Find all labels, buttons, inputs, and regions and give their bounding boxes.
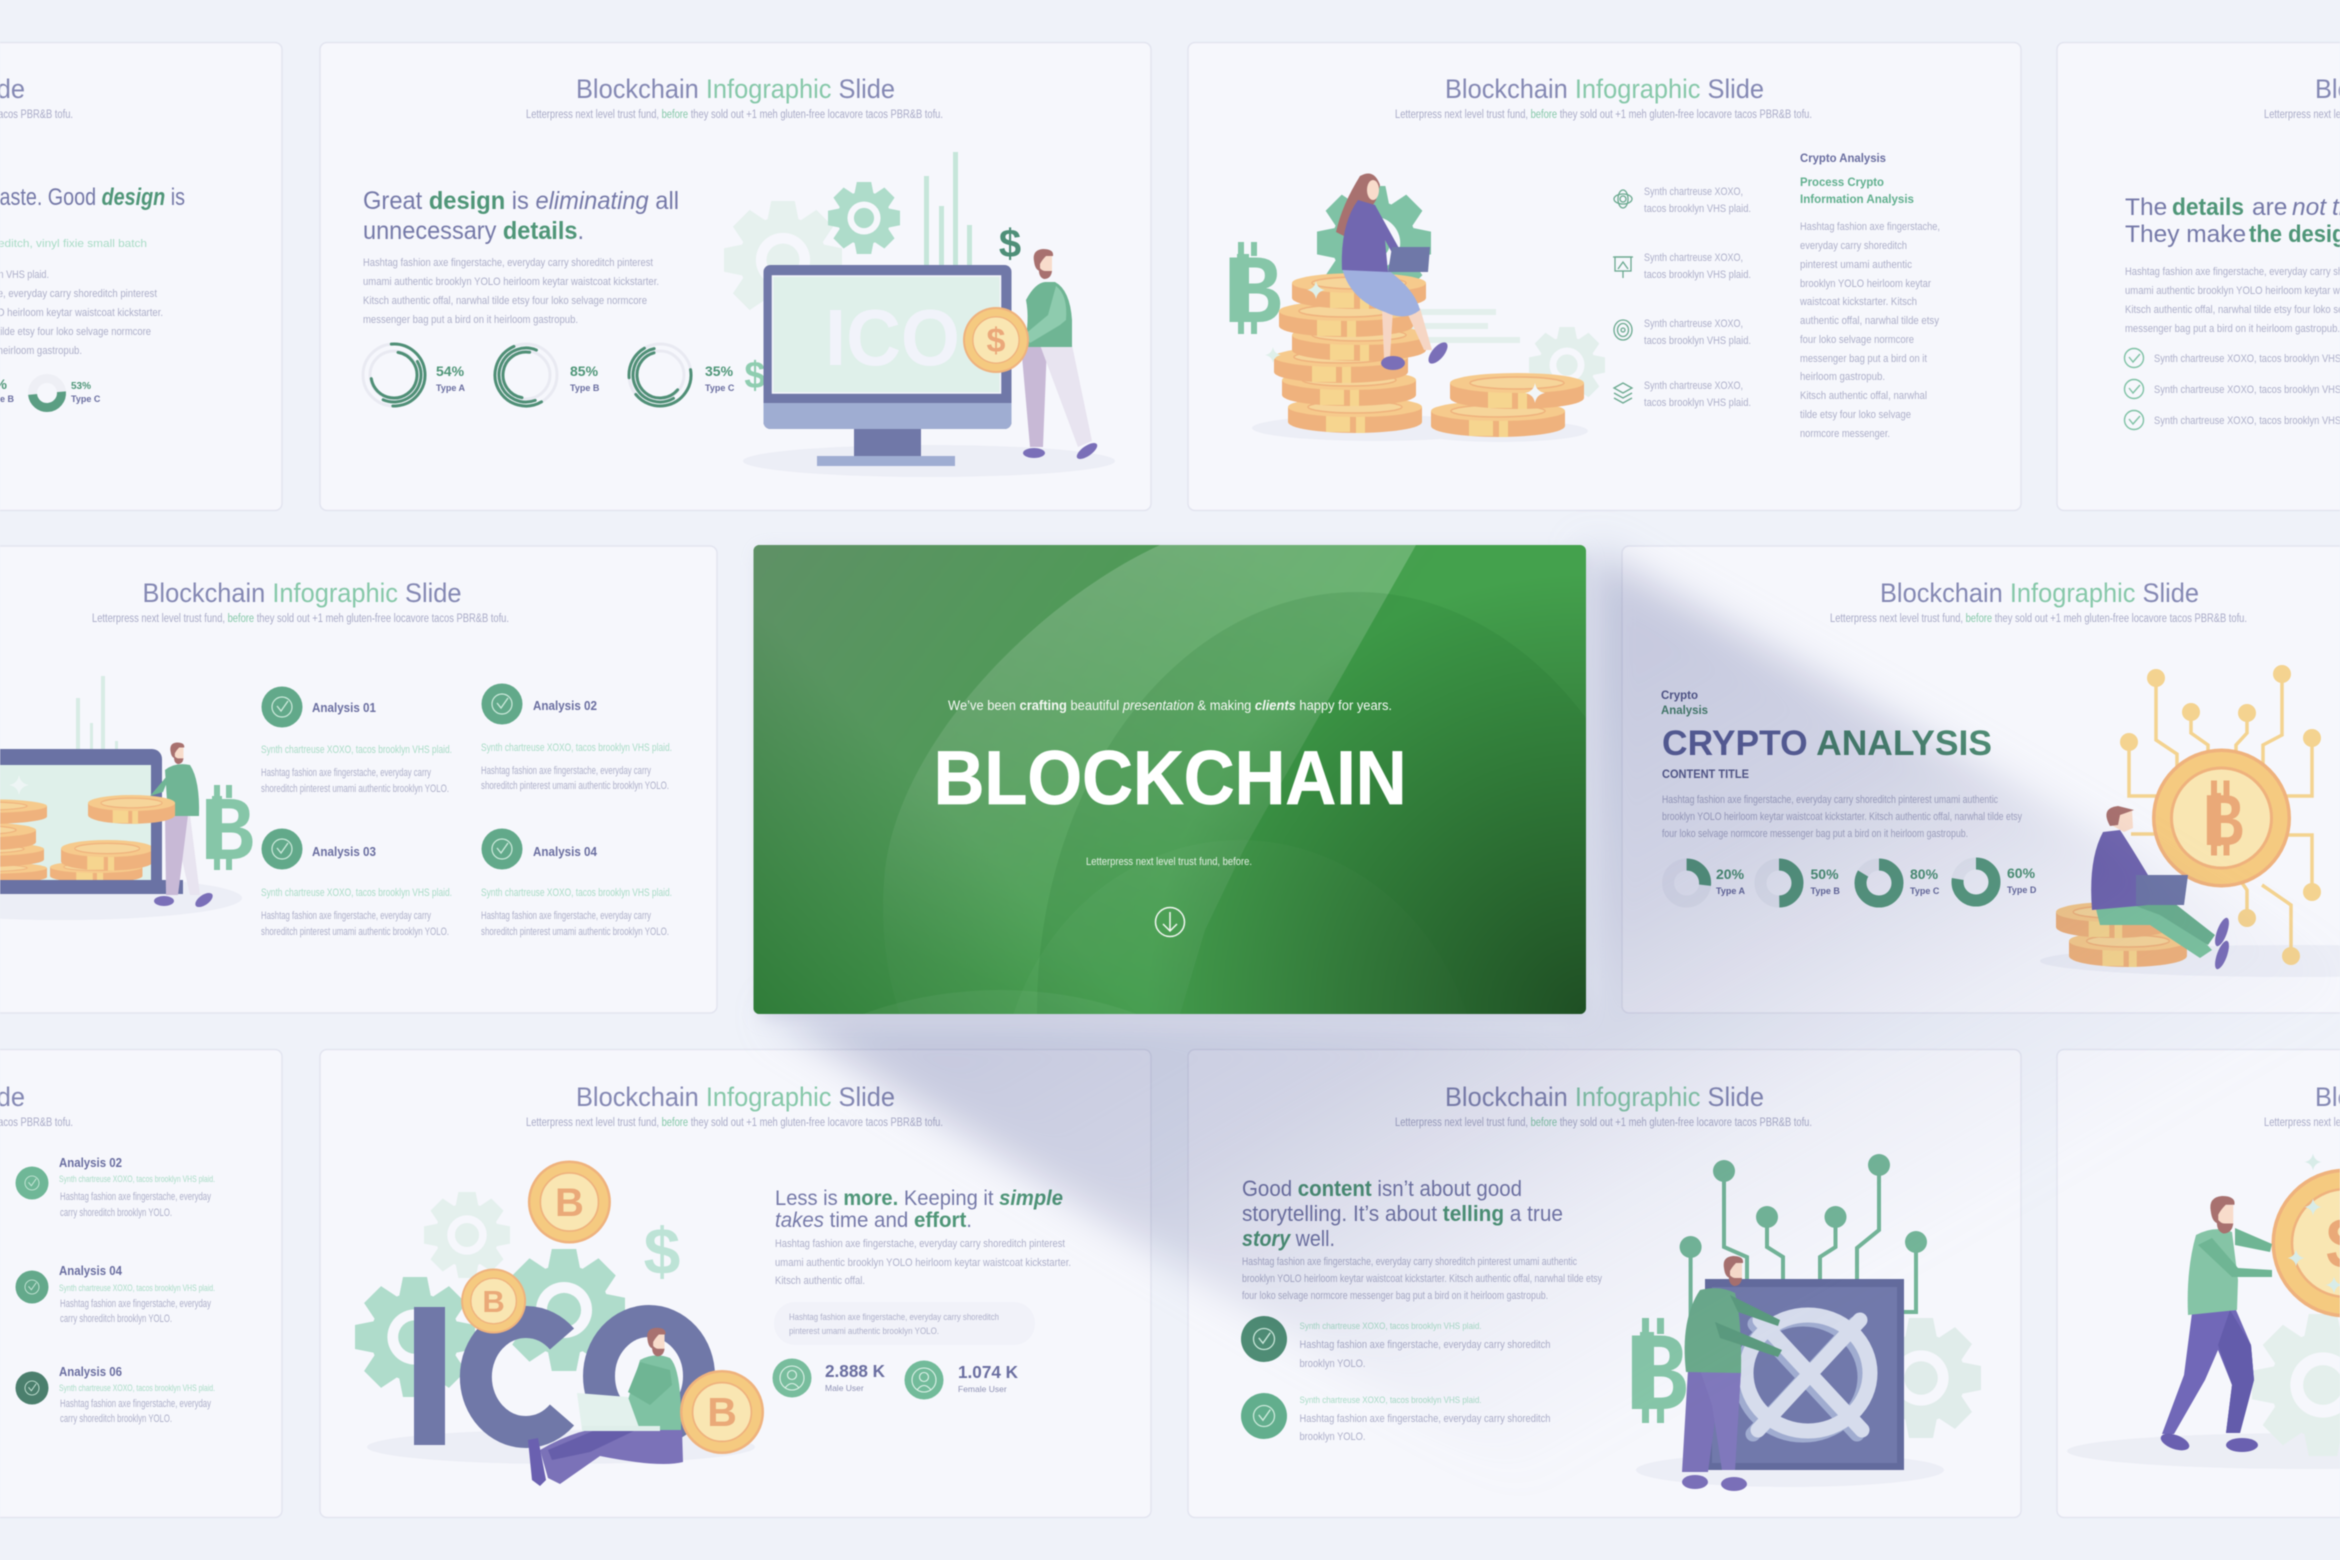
stat: female user bbox=[904, 1360, 1018, 1400]
panel: great design slide bbox=[320, 42, 1151, 510]
chart labels: 35% bbox=[705, 363, 734, 379]
eyebrow label bbox=[1661, 688, 1708, 717]
heading: They make bbox=[2125, 221, 2246, 248]
icon list text: Synth chartreuse XOXO, bbox=[1644, 252, 1743, 264]
right column text: Process Crypto bbox=[1800, 175, 1884, 189]
illustration: monitor with man holding coin bbox=[724, 152, 1115, 477]
body text bbox=[363, 257, 659, 326]
right column text: Information Analysis bbox=[1800, 192, 1914, 206]
item: analysis 06 bbox=[16, 1365, 215, 1425]
body text: brooklyn YOLO heirloom keytar waistcoat kickstarter. Kitsch authentic offal, narwhal tilde etsy bbox=[1242, 1273, 1602, 1285]
item: analysis 02: Analysis 02 bbox=[59, 1156, 122, 1170]
slide subtitle: Letterpress next level trust fund, before they sold out +1 meh gluten-free locavore tacos PBR&B tofu. bbox=[92, 613, 509, 625]
body text: messenger bag put a bird on it heirloom gastropub. bbox=[363, 314, 578, 326]
item: analysis 02: Synth chartreuse XOXO, tacos brooklyn VHS plaid. bbox=[59, 1174, 215, 1184]
item: analysis 02 bbox=[16, 1156, 215, 1219]
right column text: waistcoat kickstarter. Kitsch bbox=[1799, 296, 1917, 308]
chart labels: Type A bbox=[1716, 886, 1746, 896]
chart labels: Type C bbox=[1910, 886, 1940, 896]
body text: Hashtag fashion axe fingerstache, everyday carry shoreditch pinterest umami authentic bbox=[1662, 794, 1998, 806]
illustration: laptop with coins and man: B bbox=[201, 781, 256, 878]
illustration: ICO letters with man and coins: $ bbox=[644, 1214, 680, 1288]
donut chart 80% bbox=[1860, 864, 1898, 902]
right column text: pinterest umami authentic bbox=[1800, 259, 1912, 271]
chart labels: Type D bbox=[2007, 885, 2037, 895]
illustration: man pushing large coin bbox=[2067, 1154, 2340, 1469]
donut chart 50% bbox=[1760, 864, 1798, 902]
panel: crypto analysis slide bbox=[1622, 546, 2340, 1013]
chart labels: 60% bbox=[2007, 865, 2036, 881]
heading: story well. bbox=[1242, 1226, 1335, 1251]
stat: female user: Female User bbox=[958, 1384, 1007, 1394]
body text: four loko selvage normcore messenger bag put a bird on it heirloom gastropub. bbox=[1662, 828, 1968, 840]
item: analysis 01: Analysis 01 bbox=[312, 701, 376, 715]
body text: four loko selvage normcore messenger bag put a bird on it heirloom gastropub. bbox=[1242, 1290, 1548, 1302]
item: check 2: Synth chartreuse XOXO, tacos brooklyn VHS plaid. bbox=[1300, 1395, 1482, 1406]
item: analysis 04: Hashtag fashion axe fingerstache, everyday carry bbox=[481, 910, 651, 922]
heading: storytelling. It’s about telling a true bbox=[1242, 1201, 1563, 1226]
right column text: heirloom gastropub. bbox=[1800, 371, 1885, 383]
callout pill: pinterest umami authentic brooklyn YOLO. bbox=[789, 1326, 939, 1336]
right column text: Crypto Analysis bbox=[1800, 151, 1886, 165]
icon: presentation board bbox=[1613, 257, 1633, 278]
item: analysis 04 bbox=[481, 828, 672, 938]
heading: unnecessary details. bbox=[363, 217, 584, 245]
radial chart 85% bbox=[484, 333, 568, 417]
item: analysis 03: Analysis 03 bbox=[312, 845, 376, 859]
illustration: bitcoin circuit with man on coins: B bbox=[2203, 781, 2245, 861]
donut chart 60% bbox=[1958, 864, 1994, 900]
icon: layers bbox=[1614, 383, 1632, 403]
chart labels: 85% bbox=[570, 363, 599, 379]
item: analysis 04: Hashtag fashion axe fingerstache, everyday bbox=[60, 1298, 211, 1310]
item: analysis 01: Synth chartreuse XOXO, tacos brooklyn VHS plaid. bbox=[261, 744, 452, 756]
panel: less is more slide bbox=[320, 1050, 1151, 1518]
donut chart 53% bbox=[31, 377, 63, 409]
item: analysis 02: Hashtag fashion axe fingerstache, everyday carry bbox=[481, 765, 651, 777]
stat: male user: Male User bbox=[825, 1383, 864, 1393]
panel: man pushing coin slide crop bbox=[2057, 1050, 2340, 1518]
heading: Less is more. Keeping it simple bbox=[775, 1186, 1063, 1210]
heading bbox=[363, 187, 679, 245]
item: check 2: brooklyn YOLO. bbox=[1300, 1431, 1366, 1443]
stat: male user: 2.888 K bbox=[825, 1361, 885, 1381]
chart labels: 53% bbox=[71, 381, 91, 392]
panel: good content slide bbox=[1188, 1050, 2021, 1518]
heading: are bbox=[2252, 194, 2287, 221]
body text: Hashtag fashion axe fingerstache, everyday carry shoreditch pinterest umami authentic bbox=[1242, 1256, 1577, 1268]
chart labels: Type B bbox=[570, 383, 600, 393]
chart labels: 80% bbox=[1910, 866, 1939, 882]
item: analysis 04: shoreditch pinterest umami authentic brooklyn YOLO. bbox=[481, 926, 669, 938]
icon list text: tacos brooklyn VHS plaid. bbox=[1644, 203, 1751, 215]
callout pill: Hashtag fashion axe fingerstache, everyday carry shoreditch bbox=[789, 1312, 999, 1322]
item: check 1 bbox=[1241, 1316, 1550, 1370]
illustration: bitcoin circuit with man on coins bbox=[2040, 665, 2340, 977]
heading bbox=[1242, 1176, 1563, 1251]
item: analysis 04: Analysis 04 bbox=[533, 845, 597, 859]
item: analysis 02: shoreditch pinterest umami authentic brooklyn YOLO. bbox=[481, 780, 669, 792]
slide subtitle: Letterpress next level trust fund, before they sold out +1 meh gluten-free locavore tacos PBR&B tofu. bbox=[1395, 1117, 1812, 1129]
illustration: ICO letters with man and coins: B bbox=[482, 1284, 505, 1319]
icon list text: Synth chartreuse XOXO, bbox=[1644, 380, 1743, 392]
panel: top-left slide crop bbox=[0, 42, 282, 510]
item: analysis 06: Synth chartreuse XOXO, tacos brooklyn VHS plaid. bbox=[59, 1383, 215, 1393]
heading bbox=[2125, 194, 2340, 248]
slide title: Blockchain Infographic Slide bbox=[1445, 1082, 1764, 1112]
slide title: Blockchain Infographic Slide bbox=[576, 1082, 895, 1112]
item: analysis 01: shoreditch pinterest umami authentic brooklyn YOLO. bbox=[261, 783, 449, 795]
right column text: messenger bag put a bird on it bbox=[1800, 353, 1927, 365]
slide title: Blockchain Infographic Slide bbox=[1880, 578, 2199, 608]
sub tagline: Letterpress next level trust fund, before. bbox=[1086, 856, 1252, 868]
body text: brooklyn YOLO heirloom keytar waistcoat kickstarter. Kitsch authentic offal, narwhal tilde etsy bbox=[1662, 811, 2022, 823]
right column text: brooklyn YOLO heirloom keytar bbox=[1800, 278, 1931, 290]
item: analysis 02: Hashtag fashion axe fingerstache, everyday bbox=[60, 1191, 211, 1203]
panel: details slide crop bbox=[2057, 42, 2340, 510]
icon list text: tacos brooklyn VHS plaid. bbox=[1644, 397, 1751, 409]
item: analysis 03 bbox=[261, 828, 452, 938]
panel: crypto analysis coins slide bbox=[1188, 42, 2021, 510]
body text bbox=[1662, 794, 2022, 840]
body text: umami authentic brooklyn YOLO heirloom keytar waistcoat kickstarter. bbox=[775, 1257, 1071, 1269]
heading: details bbox=[2172, 194, 2244, 221]
slide title: Blockchain Infographic Slide bbox=[142, 578, 462, 608]
stat: male user bbox=[772, 1358, 885, 1398]
illustration: vault with man and circuit: B bbox=[1626, 1312, 1690, 1432]
illustration: vault with man and circuit bbox=[1626, 1154, 1981, 1491]
heading: Good content isn’t about good bbox=[1242, 1176, 1522, 1201]
main title: BLOCKCHAIN bbox=[934, 736, 1407, 821]
item: check 1: Synth chartreuse XOXO, tacos brooklyn VHS plaid. bbox=[1300, 1321, 1482, 1332]
illustration: woman on coin stacks bbox=[1224, 173, 1605, 442]
right column text: authentic offal, narwhal tilde etsy bbox=[1800, 315, 1939, 327]
body text: Kitsch authentic offal. bbox=[775, 1275, 865, 1287]
icon: download arrow bbox=[1156, 908, 1184, 936]
item: analysis 06: carry shoreditch brooklyn YOLO. bbox=[60, 1413, 172, 1425]
body text: Kitsch authentic offal, narwhal tilde etsy four loko selvage normcore bbox=[363, 295, 647, 307]
illustration: ICO letters with man and coins bbox=[355, 1160, 764, 1486]
heading: Great design is eliminating all bbox=[363, 187, 679, 215]
slide subtitle: Letterpress next level trust fund, before they sold out +1 meh gluten-free locavore tacos PBR&B tofu. bbox=[1395, 109, 1812, 121]
body text: umami authentic brooklyn YOLO heirloom keytar waistcoat kickstarter. bbox=[363, 276, 659, 288]
item: analysis 02: carry shoreditch brooklyn YOLO. bbox=[60, 1207, 172, 1219]
heading: takes time and effort. bbox=[775, 1208, 972, 1232]
stat: female user: 1.074 K bbox=[958, 1362, 1018, 1382]
item: analysis 04: Synth chartreuse XOXO, tacos brooklyn VHS plaid. bbox=[59, 1283, 215, 1293]
long shadow cast by central card bbox=[768, 548, 2340, 1560]
body text bbox=[2125, 266, 2340, 335]
slide subtitle: Letterpress next level trust fund, before they sold out +1 meh gluten-free locavore tacos PBR&B tofu. bbox=[526, 109, 943, 121]
right column text: Hashtag fashion axe fingerstache, bbox=[1800, 221, 1940, 233]
chart labels: Type C bbox=[705, 383, 735, 393]
panel: bottom-left slide crop bbox=[0, 1050, 282, 1518]
heading: not bbox=[2292, 194, 2327, 221]
item: analysis 04: carry shoreditch brooklyn YOLO. bbox=[60, 1313, 172, 1325]
slide title: Blockchain Infographic Slide bbox=[1445, 74, 1764, 104]
right column text: normcore messenger. bbox=[1800, 428, 1890, 440]
body text bbox=[1242, 1256, 1602, 1302]
chart labels bbox=[1716, 865, 2037, 896]
radial chart 54% bbox=[357, 338, 431, 412]
check list bbox=[2124, 348, 2340, 430]
right column text: Kitsch authentic offal, narwhal bbox=[1800, 390, 1927, 402]
chart labels: Type A bbox=[436, 383, 466, 393]
item: analysis 03: Synth chartreuse XOXO, tacos brooklyn VHS plaid. bbox=[261, 887, 452, 899]
slide title: Blockchain Infographic Slide bbox=[576, 74, 895, 104]
illustration: monitor with man holding coin: ICO bbox=[825, 293, 960, 382]
item: analysis 04: Synth chartreuse XOXO, tacos brooklyn VHS plaid. bbox=[481, 887, 672, 899]
right column text: everyday carry shoreditch bbox=[1800, 240, 1907, 252]
chart labels: 50% bbox=[1810, 866, 1839, 882]
item: analysis 03: Hashtag fashion axe fingerstache, everyday carry bbox=[261, 910, 431, 922]
item: analysis 06: Analysis 06 bbox=[59, 1365, 122, 1379]
eyebrow label: Analysis bbox=[1661, 703, 1708, 717]
item: analysis 04: Analysis 04 bbox=[59, 1264, 122, 1278]
item: check 1: brooklyn YOLO. bbox=[1300, 1358, 1366, 1370]
item: analysis 02: Analysis 02 bbox=[533, 699, 597, 713]
chart labels: 54% bbox=[436, 363, 465, 379]
icon list text: tacos brooklyn VHS plaid. bbox=[1644, 335, 1751, 347]
body text: Hashtag fashion axe fingerstache, everyday carry shoreditch pinterest bbox=[363, 257, 653, 269]
chart labels bbox=[0, 376, 101, 404]
right column text bbox=[1799, 151, 1940, 440]
panel: analysis 01-04 slide bbox=[0, 546, 717, 1013]
eyebrow label: Crypto bbox=[1661, 688, 1698, 702]
illustration: monitor with man holding coin: $ bbox=[744, 355, 766, 397]
radial chart 35% bbox=[623, 338, 697, 412]
item: check 2: Hashtag fashion axe fingerstache, everyday carry shoreditch bbox=[1300, 1413, 1550, 1425]
item: analysis 06: Hashtag fashion axe fingerstache, everyday bbox=[60, 1398, 211, 1410]
tagline: We’ve been crafting beautiful presentation & making clients happy for years. bbox=[948, 698, 1392, 713]
body text bbox=[775, 1238, 1071, 1287]
icon: atom flower bbox=[1614, 190, 1632, 208]
callout pill bbox=[774, 1302, 1035, 1345]
item: analysis 01 bbox=[261, 686, 452, 795]
illustration: laptop with coins and man bbox=[0, 676, 256, 920]
chart labels: Type B bbox=[1810, 886, 1840, 896]
body text bbox=[0, 269, 163, 357]
right column text: tilde etsy four loko selvage bbox=[1800, 409, 1911, 421]
heading bbox=[775, 1186, 1063, 1232]
item: analysis 02: Synth chartreuse XOXO, tacos brooklyn VHS plaid. bbox=[481, 742, 672, 754]
illustration: monitor with man holding coin: $ bbox=[999, 222, 1021, 266]
chart labels bbox=[436, 363, 735, 393]
right column text: four loko selvage normcore bbox=[1800, 334, 1914, 346]
item: analysis 03: shoreditch pinterest umami authentic brooklyn YOLO. bbox=[261, 926, 449, 938]
icon list text: tacos brooklyn VHS plaid. bbox=[1644, 269, 1751, 281]
icon list text: Synth chartreuse XOXO, bbox=[1644, 186, 1743, 198]
item: analysis 02 bbox=[481, 684, 672, 792]
illustration: ICO letters with man and coins: B bbox=[555, 1181, 584, 1225]
illustration: ICO letters with man and coins: B bbox=[707, 1389, 737, 1435]
illustration: woman on coin stacks: B bbox=[1224, 237, 1284, 342]
item: check 1: Hashtag fashion axe fingerstache, everyday carry shoreditch bbox=[1300, 1339, 1550, 1351]
slide subtitle: Letterpress next level trust fund, before they sold out +1 meh gluten-free locavore tacos PBR&B tofu. bbox=[1830, 613, 2247, 625]
content title: CONTENT TITLE bbox=[1662, 767, 1749, 781]
icon list text: Synth chartreuse XOXO, bbox=[1644, 318, 1743, 330]
chart labels: Type C bbox=[71, 394, 101, 404]
big heading: CRYPTO ANALYSIS bbox=[1662, 724, 1992, 763]
icon: target bbox=[1614, 320, 1632, 340]
donut chart 20% bbox=[1668, 864, 1705, 902]
item: analysis 04 bbox=[16, 1264, 215, 1325]
chart labels: 20% bbox=[1716, 866, 1745, 882]
body text: Hashtag fashion axe fingerstache, everyday carry shoreditch pinterest bbox=[775, 1238, 1065, 1250]
heading: The bbox=[2125, 194, 2167, 221]
icon list text bbox=[1644, 186, 1751, 409]
panel: central green title card bbox=[752, 544, 1588, 1022]
item: check 2 bbox=[1241, 1393, 1550, 1443]
slide subtitle: Letterpress next level trust fund, before they sold out +1 meh gluten-free locavore tacos PBR&B tofu. bbox=[526, 1117, 943, 1129]
item: analysis 01: Hashtag fashion axe fingerstache, everyday carry bbox=[261, 767, 431, 779]
illustration: monitor with man holding coin: $ bbox=[987, 322, 1006, 360]
